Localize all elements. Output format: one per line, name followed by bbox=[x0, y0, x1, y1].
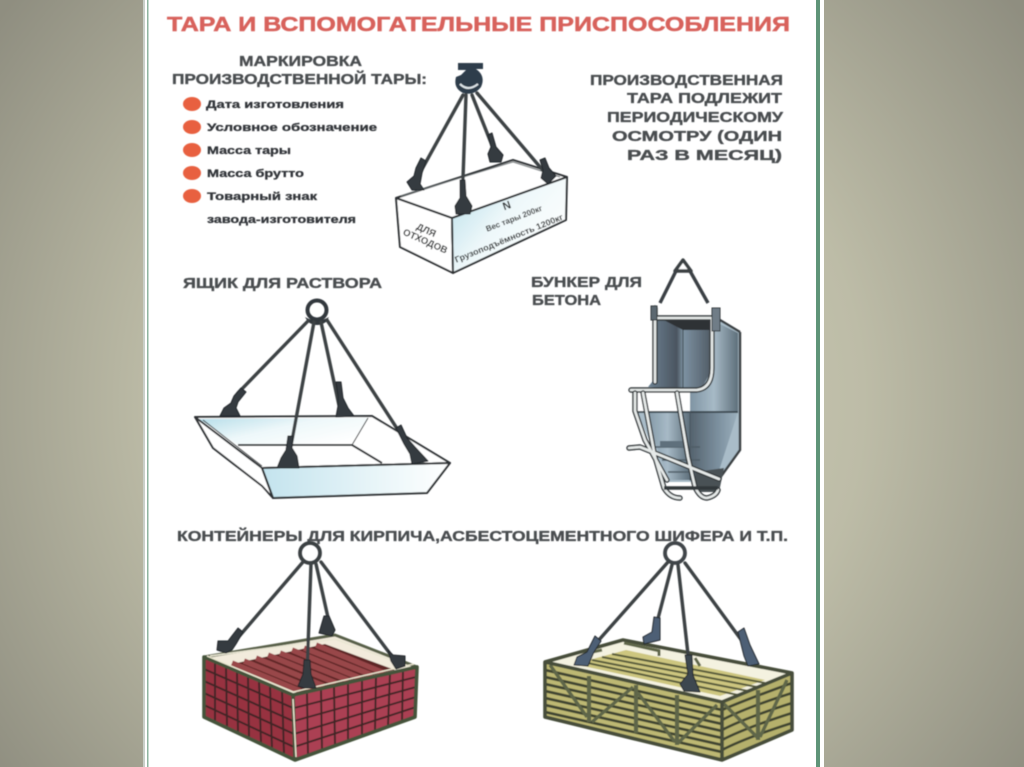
container label: mass and capacity: Вес тары 200кг bbox=[485, 204, 544, 234]
heading: containers for bricks and slate: КОНТЕЙНЕРЫ ДЛЯ КИРПИЧА,АСБЕСТОЦЕМЕНТНОГО ШИФЕРА И Т.П. bbox=[177, 527, 788, 545]
illustration: timber crate container bbox=[545, 543, 792, 760]
inspection note: ПЕРИОДИЧЕСКОМУ bbox=[607, 110, 784, 126]
marking list: Дата изготовления bbox=[206, 99, 344, 111]
container label: mass and capacity: N bbox=[501, 199, 513, 213]
marking list: Условное обозначение bbox=[207, 122, 377, 134]
inspection note: ОСМОТРУ (ОДИН bbox=[612, 129, 782, 145]
inspection note: ТАРА ПОДЛЕЖИТ bbox=[627, 91, 782, 107]
heading: marking of production containers: МАРКИРОВКА bbox=[239, 54, 363, 70]
marking list: Товарный знак bbox=[207, 191, 318, 203]
marking list bbox=[183, 97, 377, 226]
marking list: Масса брутто bbox=[207, 168, 304, 180]
container label: mass and capacity: Грузоподъёмность 1200кг bbox=[453, 212, 565, 265]
inspection note: РАЗ В МЕСЯЦ) bbox=[627, 148, 782, 164]
title: ТАРА И ВСПОМОГАТЕЛЬНЫЕ ПРИСПОСОБЛЕНИЯ bbox=[167, 13, 790, 36]
illustration: mortar box on slings bbox=[195, 300, 450, 498]
heading: mortar box: ЯЩИК ДЛЯ РАСТВОРА bbox=[183, 276, 383, 292]
container label: for waste: ОТХОДОВ bbox=[401, 227, 449, 256]
heading: concrete hopper: БУНКЕР ДЛЯ bbox=[531, 275, 642, 291]
heading: marking of production containers bbox=[172, 54, 427, 88]
inspection note bbox=[590, 73, 784, 164]
illustration: waste container on slings bbox=[396, 63, 567, 273]
poster panel bbox=[143, 0, 824, 767]
illustration: brick container bbox=[204, 543, 417, 760]
marking list: завода-изготовителя bbox=[207, 214, 356, 226]
heading: concrete hopper: БЕТОНА bbox=[532, 293, 602, 309]
heading: marking of production containers: ПРОИЗВОДСТВЕННОЙ ТАРЫ: bbox=[172, 70, 427, 88]
container label: for waste: ДЛЯ bbox=[415, 222, 438, 240]
marking list: Масса тары bbox=[207, 145, 291, 157]
heading: concrete hopper bbox=[531, 275, 642, 309]
inspection note: ПРОИЗВОДСТВЕННАЯ bbox=[590, 73, 783, 89]
illustration: concrete hopper bbox=[629, 260, 740, 498]
